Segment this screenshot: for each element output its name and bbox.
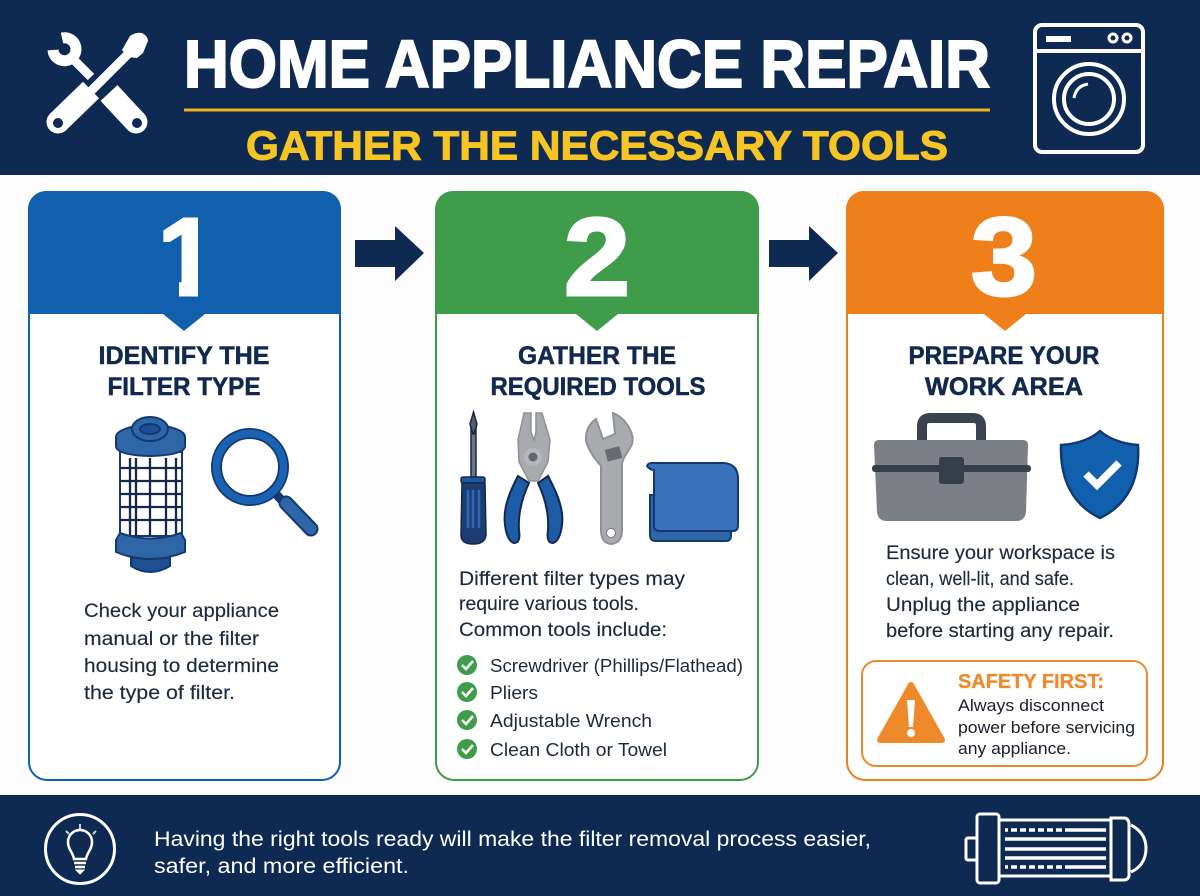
step 3 body text <box>886 542 1115 642</box>
icon: shield with check <box>1061 431 1138 518</box>
step 1 heading <box>98 342 270 401</box>
step 3 heading: PREPARE YOUR <box>908 342 1100 370</box>
icon: screwdriver <box>461 412 486 544</box>
footer band <box>0 795 1200 896</box>
step 3 heading <box>908 342 1100 401</box>
icon: warning triangle <box>880 685 942 740</box>
panel: step 2 <box>435 191 759 780</box>
step 1 body text: Check your appliance <box>84 600 279 622</box>
panel: step 1 <box>28 191 341 780</box>
step 1 heading: FILTER TYPE <box>108 373 260 401</box>
step 1 number banner: 1 <box>157 196 219 319</box>
item: screwdriver: Screwdriver (Phillips/Flathead) <box>490 655 743 676</box>
step 3 body text: Unplug the appliance <box>886 594 1080 616</box>
step 3 body text: clean, well-lit, and safe. <box>886 568 1074 590</box>
item: pliers <box>457 682 538 703</box>
step 1 number banner <box>28 191 341 331</box>
icon: washing machine <box>1035 25 1143 152</box>
icon: folded cloth <box>647 463 738 541</box>
icon: magnifying glass <box>216 434 311 529</box>
checklist <box>457 655 743 760</box>
step 2 number banner: 2 <box>564 196 630 319</box>
arrow: step 1 to 2 <box>355 226 424 281</box>
step 3 heading: WORK AREA <box>925 373 1083 401</box>
step 3 body text: before starting any repair. <box>886 620 1114 642</box>
step 3 body text: Ensure your workspace is <box>886 542 1115 564</box>
icon: toolbox <box>872 418 1031 521</box>
step 2 heading: GATHER THE <box>518 342 676 370</box>
callout: safety first: power before servicing <box>958 718 1135 737</box>
icon: pliers <box>505 413 562 543</box>
item: pliers: Pliers <box>490 682 538 703</box>
step 3 number banner: 3 <box>971 196 1037 319</box>
icon: filter outline <box>966 814 1146 883</box>
callout: safety first: Always disconnect <box>958 696 1104 715</box>
callout: safety first: any appliance. <box>958 739 1071 758</box>
icon: crossed wrench and screwdriver <box>46 33 148 133</box>
panel: step 3 <box>846 191 1164 780</box>
callout: safety first <box>862 661 1147 766</box>
icon: filter cartridge <box>116 417 185 572</box>
icon: light bulb <box>46 814 114 884</box>
step 2 number banner <box>435 191 759 331</box>
footer message: safer, and more efficient. <box>154 855 409 878</box>
arrow: step 2 to 3 <box>769 226 838 281</box>
step 3 number banner <box>846 191 1164 331</box>
step 2 heading <box>490 342 706 401</box>
header band <box>0 0 1200 175</box>
step 2 intro text <box>459 568 685 641</box>
subtitle: GATHER THE NECESSARY TOOLS <box>246 122 948 168</box>
step 1 body text: housing to determine <box>84 655 279 677</box>
item: cloth: Clean Cloth or Towel <box>490 739 667 760</box>
callout: safety first: SAFETY FIRST: <box>958 671 1104 693</box>
item: wrench: Adjustable Wrench <box>490 710 652 731</box>
step 2 intro text: Common tools include: <box>459 619 667 641</box>
footer message: Having the right tools ready will make the filter removal process easier, <box>154 828 871 851</box>
footer message <box>154 828 871 878</box>
step 1 body text: the type of filter. <box>84 682 235 704</box>
step 2 heading: REQUIRED TOOLS <box>490 373 706 401</box>
step 1 body text <box>84 600 279 704</box>
step 1 heading: IDENTIFY THE <box>98 342 270 370</box>
step 2 intro text: Different filter types may <box>459 568 685 590</box>
step 1 body text: manual or the filter <box>84 628 260 650</box>
step 2 intro text: require various tools. <box>459 593 639 615</box>
icon: adjustable wrench <box>586 413 633 544</box>
title: HOME APPLIANCE REPAIR <box>184 27 990 102</box>
